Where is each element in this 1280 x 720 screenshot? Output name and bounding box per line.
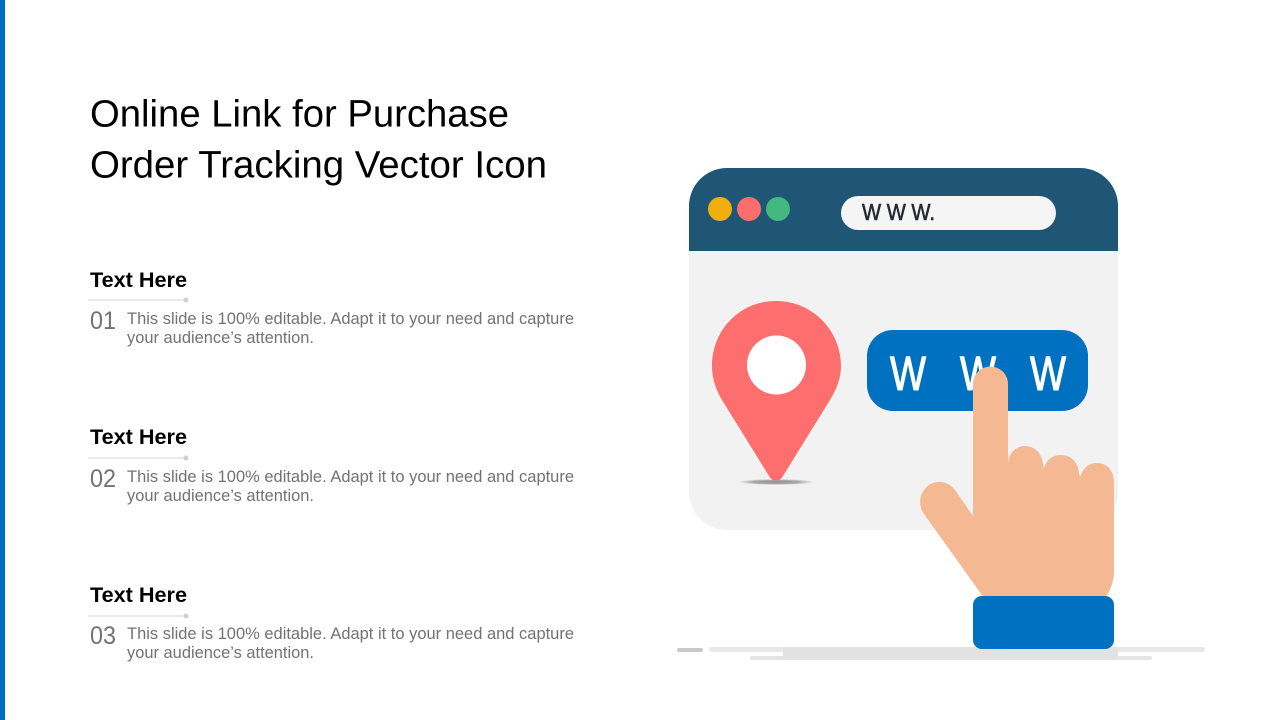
description 02 [127, 468, 574, 505]
divider with dot 03 [88, 614, 188, 618]
location pin [712, 301, 841, 485]
description 01: This slide is 100% editable. Adapt it to your need and capture [127, 310, 574, 328]
www button [867, 330, 1088, 411]
description 03 [127, 625, 574, 662]
text block 02 [88, 426, 574, 505]
window control dots [708, 197, 790, 221]
illustration: browser window with location pin and pointing hand [677, 168, 1205, 660]
title [90, 94, 547, 186]
browser window body [689, 251, 1118, 530]
divider with dot 01 [88, 298, 188, 302]
title: Order Tracking Vector Icon [90, 144, 547, 186]
address bar: W W W. [862, 199, 935, 225]
number 02: 02 [90, 465, 116, 493]
left accent bar [0, 0, 5, 720]
description 02: your audience’s attention. [127, 487, 314, 505]
description 02: This slide is 100% editable. Adapt it to your need and capture [127, 468, 574, 486]
heading 01: Text Here [90, 269, 187, 292]
divider with dot 02 [88, 456, 188, 460]
description 03: This slide is 100% editable. Adapt it to your need and capture [127, 625, 574, 643]
text block 03 [88, 584, 574, 662]
description 01: your audience’s attention. [127, 329, 314, 347]
address bar [841, 196, 1056, 230]
www button: W [1030, 348, 1067, 401]
pointing hand [920, 366, 1114, 598]
www button: W [960, 348, 997, 401]
www button: W [890, 348, 927, 401]
number 01: 01 [90, 307, 116, 335]
heading 02: Text Here [90, 426, 187, 449]
text block 01 [88, 269, 574, 347]
heading 03: Text Here [90, 584, 187, 607]
description 01 [127, 310, 574, 347]
description 03: your audience’s attention. [127, 644, 314, 662]
browser header bar [689, 168, 1118, 251]
ground shadow [677, 647, 1205, 660]
title: Online Link for Purchase [90, 94, 509, 136]
blue cuff [973, 596, 1114, 649]
number 03: 03 [90, 622, 116, 650]
